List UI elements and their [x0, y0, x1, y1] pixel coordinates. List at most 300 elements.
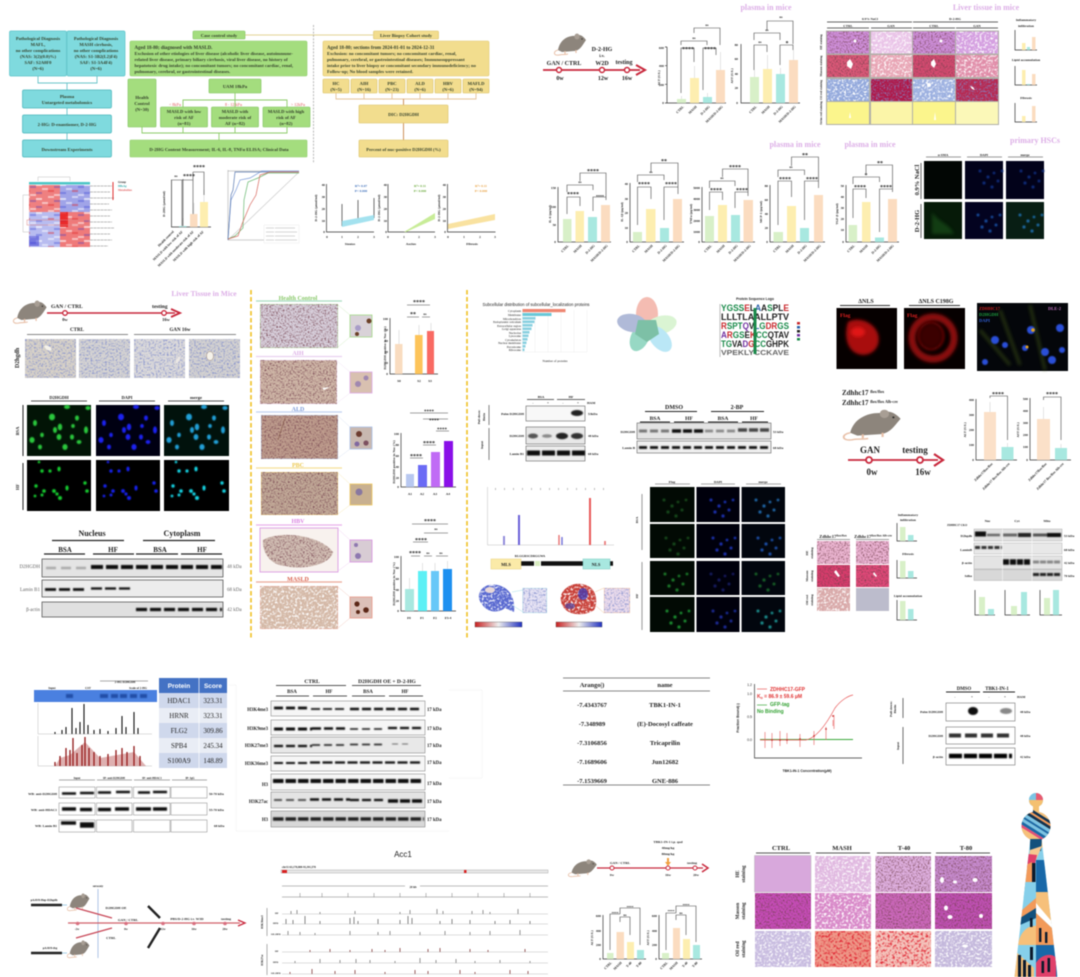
bar chart: IL-1β: 0 [626, 240, 628, 244]
bar chart: fibrosis grade: F1 [420, 616, 424, 620]
bar chart: subcellular distribution: Lysosome [509, 334, 522, 338]
bar chart: activity grade: 60 [396, 454, 399, 458]
bar chart: MCP-1: MASH/D-2-HG [803, 244, 822, 263]
box: percent positive [359, 140, 448, 157]
bar chart: Zdhhc17 AST: Zdhhc17flox/flox [1027, 462, 1048, 482]
western blot: histone modifications: H3K27me3 [245, 744, 269, 749]
scatter: fibrosis correlation 2: 10 [384, 219, 387, 223]
cohort groups: (N=94) [469, 87, 483, 92]
western blot: fractionation Zdhhc17: β-actin [962, 561, 972, 565]
scatter: fibrosis correlation 3: 20 [443, 207, 446, 211]
panel: D2HGDH immunofluorescence [15, 395, 229, 511]
scatter: fibrosis correlation 1: 20 [322, 207, 325, 211]
bar chart: TBK1 AST: MASH [669, 961, 679, 971]
panel: TBK1-IN-1 histology grid: Oil red [736, 941, 741, 957]
bar chart: ALT: ns [705, 23, 709, 27]
panel: Zdhhc17 liver histology: Zdhhc17 [854, 534, 871, 539]
panel: Zdhhc17 liver histology [805, 534, 893, 611]
bar chart: TBK1 AST: T-80 [691, 961, 699, 968]
panel: D2hgdh immunohistochemistry [15, 328, 240, 378]
bar chart: TNFα: MASH/D-2-HG [733, 244, 752, 263]
cohort groups: (N=6) [414, 87, 426, 92]
panel: TBK1-IN-1 histology grid: T-80 [960, 845, 972, 852]
sequence logo: YGSSELAASPLE [721, 303, 789, 313]
bar chart: AST: 0 [736, 101, 738, 105]
bar chart: IL-1β: 30 [625, 197, 628, 201]
bar chart: ALT: MASH/D-2-HG [705, 105, 724, 124]
bar chart: MCP-1: 20 [765, 226, 768, 230]
panel: histology grid D-2-HG: CTRL [843, 24, 853, 28]
timeline: GAN liver tissue: testing [152, 304, 168, 310]
bar chart: IL-1β: ns [649, 170, 653, 174]
bar chart: TGF-β: D-2-HG [871, 244, 882, 255]
panel: histology grid D-2-HG [819, 17, 999, 125]
timeline: D-2-HG mouse model: 12w [598, 76, 609, 82]
panel: Flag DAPI merge immunofluorescence grid: BSA [635, 516, 639, 523]
western blot: palmitoylation pull-down: 53kDa [588, 412, 598, 416]
cohort groups: (N=5) [330, 87, 342, 92]
box: health control: Health [135, 95, 149, 100]
mini bar charts: liver histology scores: Lipid accumulation [1012, 58, 1040, 62]
diagram: AAV injection timeline: 16w [191, 927, 197, 931]
bar chart: TGF-β: **** [880, 185, 892, 191]
bar chart: subcellular distribution: Endoplasmic reticulum [493, 320, 522, 324]
western blot: TBK1-IN-1 palmitoylation: β-actin [933, 755, 943, 759]
diagram: AAV injection timeline: 12w [160, 927, 166, 931]
box: high risk of AF: MASLD with high [268, 109, 305, 114]
IHC: HBV: HBV [291, 519, 305, 525]
bar chart: MCP-1: 0 [766, 240, 768, 244]
western blot: palmitoylation pull-down: 68 kDa [588, 452, 599, 456]
western blot: palmitoylation pull-down: Biotin [482, 413, 486, 421]
bar chart: Zdhhc17 ALT: Zdhhc17 flox/flox Alb-cre [982, 462, 1011, 491]
cohort groups: HC [333, 81, 339, 86]
table: interacting proteins: 148.89 [203, 757, 223, 765]
thresholds: kPa labels: < 8kPa [169, 102, 181, 107]
bar chart: TBK1 ALT: 400 [596, 929, 601, 933]
scatter: fibrosis correlation 1: D-2-HG (μmol/ml) [314, 195, 318, 221]
chart: ROC curves [228, 170, 299, 243]
bar chart: TNFα: TNFα (pg/ml) [689, 204, 693, 224]
bar chart: fibrosis grade: **** [415, 538, 427, 544]
panel: histology grid D-2-HG: HE staining [819, 34, 823, 50]
sequence logo: Protein Sequence Logo [736, 297, 774, 301]
bar chart: subcellular distribution: Subcellular distribution of subcellular_localization proteins [482, 302, 590, 307]
box: MASH cirrhosis diagnosis: MASH cirrhosis, [79, 42, 113, 47]
panel: patient liver IHC column [256, 296, 372, 629]
box: cohort title [374, 31, 438, 39]
bar chart: TBK1 ALT: 600 [596, 914, 601, 918]
bar chart: TGF-β: 20 [841, 217, 844, 221]
image: ZDHHC17 D2HGDH DAPI immunofluorescence: DLE-2 [1048, 306, 1062, 311]
bar chart: fibrosis grade: **** [424, 519, 436, 525]
western blot: histone modifications: D2HGDH OE + D-2-HG [358, 679, 417, 685]
diagram: AAV injection timeline: -2w [75, 927, 80, 931]
box: MAFL diagnosis: (N=6) [32, 66, 44, 71]
bar chart: Zdhhc17 AST: 100 [1023, 445, 1028, 449]
table: docking results: Tricaprilin [650, 740, 680, 747]
chart: MST binding curve: No Binding [757, 709, 784, 715]
bar chart: AST: AST (U/L) [730, 68, 734, 84]
western blot: co-IP validation: IP: anti-HDAC1 [142, 777, 162, 780]
scatter: fibrosis correlation 2: 30 [384, 195, 387, 199]
table: docking results: -7.1689606 [577, 759, 608, 766]
bar chart: ALT: MASH [688, 105, 698, 115]
western blot: TBK1-IN-1 palmitoylation: D2HGDH [928, 734, 943, 738]
thresholds: kPa labels: > 12kPa [291, 102, 305, 107]
bar chart: activity grade: A1 [408, 492, 412, 496]
box: inclusion and exclusion criteria: Aged 18-80; diagnosed with MASLD. [134, 46, 212, 51]
IHC: MASLD: MASLD [287, 577, 309, 583]
scatter: fibrosis correlation 2: Ascites [406, 242, 417, 246]
western blot: co-IP validation: 50-70 kDa [209, 792, 224, 796]
connector arrows: cohort flow [336, 93, 476, 99]
bar chart: TNFα: **** [736, 188, 748, 194]
box: MAFL diagnosis [10, 31, 66, 76]
bar chart: ALT: ns [692, 36, 696, 40]
scatter: fibrosis correlation 1: 40 [322, 183, 325, 187]
bar chart: fibrosis grade: ns [439, 551, 443, 555]
IHC: HBV [256, 519, 372, 572]
panel: Zdhhc17 liver histology: staining [810, 547, 814, 559]
timeline: D-2-HG mouse model: D-2-HG [592, 47, 613, 53]
box: 2-HG enantiomer: 2-HG: D-enantiomer, D-2-HG [38, 122, 97, 127]
bar chart: TGF-β [835, 161, 899, 263]
table: interacting proteins: SPB4 [171, 742, 187, 750]
bar chart: TBK1 AST: 400 [652, 929, 657, 933]
western blot: TBK1-IN-1 palmitoylation: Biotin [893, 704, 897, 713]
diagram: AAV injection timeline: 0w [124, 927, 129, 931]
table: docking results: -7.3106856 [577, 740, 608, 747]
scatter: fibrosis correlation 1: 0 [323, 230, 325, 234]
bar chart: AST: 60 [735, 57, 738, 61]
panel: Zdhhc17 liver histology: flox/flox Alb-cre [871, 534, 893, 538]
protein surface: wild type [475, 584, 547, 627]
bar chart: activity grade: A3 [433, 492, 437, 496]
bar chart: subcellular distribution: Number of proteins [543, 359, 568, 363]
table: interacting proteins: HRNR [169, 712, 189, 720]
box: MASH cirrhosis diagnosis: (N=6) [90, 66, 102, 71]
table: interacting proteins [159, 678, 227, 768]
bar chart: Zdhhc17 AST: 200 [1023, 433, 1028, 437]
IHC: MASLD [256, 577, 372, 629]
timeline: Zdhhc17 conditional mouse: 16w [915, 467, 931, 477]
scatter: fibrosis correlation 2: 2 [418, 235, 420, 239]
bar chart: steatosis grade: S0 [397, 379, 401, 383]
bar chart: Zdhhc17 AST: **** [1046, 392, 1058, 398]
table: interacting proteins: 245.34 [203, 742, 223, 750]
bar chart: TNFα: MASH [716, 244, 726, 254]
bar chart: MCP-1: 60 [765, 198, 768, 202]
bar chart: TBK1 ALT: **** [612, 911, 619, 915]
bar chart: fibrosis grade: F3-4 [445, 616, 452, 620]
bar chart: subcellular distribution: Nuclear membrane [498, 341, 522, 345]
scatter: fibrosis correlation 3: 0 [447, 235, 449, 239]
western blot: histone modifications: 17 kDa [427, 782, 442, 787]
box: inclusion and exclusion criteria: pulmonary, cerebral, or gastrointestinal diseases. [134, 69, 230, 74]
scatter: fibrosis correlation 1: R²= 0.07 [355, 184, 367, 188]
box: downstream experiments: Downstream Experiments [41, 147, 93, 152]
panel: D2hgdh immunohistochemistry: D2hgdh [15, 347, 21, 368]
western blot: TBK1-IN-1 palmitoylation: + [1004, 695, 1006, 699]
image: ZDHHC17 D2HGDH DAPI immunofluorescence: ZDHHC17 [979, 306, 1001, 311]
timeline: TBK1-IN-1 treatment: GAN / CTRL [610, 861, 631, 865]
panel: D2HGDH immunofluorescence: HF [15, 484, 20, 490]
timeline: TBK1-IN-1 treatment: 16w [665, 873, 671, 877]
box: MAFL diagnosis: (NAS: 3(2)(0.0)%) [20, 54, 56, 59]
heading: liver tissue in mice: Liver tissue in mice [953, 3, 1020, 12]
bar chart: IL-1β: ** [661, 159, 667, 165]
scatter: fibrosis correlation 1: 3 [373, 235, 375, 239]
bar chart: subcellular distribution: Peroxisome [507, 345, 522, 349]
timeline: Zdhhc17 conditional mouse: testing [902, 445, 928, 455]
bar chart: TNFα: 0 [698, 240, 700, 244]
bar chart: Zdhhc17 AST: AST (U/L) [1016, 422, 1020, 438]
bar chart: TBK1 ALT: ALT (U/L) [590, 930, 594, 946]
western blot: palmitoylation pull-down: BSA [538, 395, 545, 399]
panel: TBK1-IN-1 histology grid: Masson [736, 903, 741, 919]
panel: Zdhhc17 liver histology: HE [805, 550, 809, 555]
timeline: D-2-HG mouse model: W2D [595, 61, 609, 67]
heatmap: metabolites: Metabolites [118, 189, 133, 192]
box: health control [128, 79, 156, 127]
bar chart: steatosis grade: 60 [385, 339, 388, 343]
box: case control study title: Case control study [201, 33, 238, 38]
western blot: co-IP validation: Input [74, 777, 80, 780]
bar chart: activity grade: 20 [396, 476, 399, 480]
timeline: D-2-HG mouse model: testing [616, 60, 632, 66]
bar chart: ALT: D-2-HG [700, 105, 711, 116]
panel: nuclear cytoplasmic western blot: Lamin B1 [20, 588, 40, 593]
western blot: co-IP validation: WB: anti-HDAC1 [31, 808, 57, 812]
panel: nuclear cytoplasmic western blot: BSA [153, 546, 167, 554]
bar chart: plasma D-2-HG: **** [183, 174, 195, 180]
venn diagram: five sets [616, 297, 679, 356]
diagram: AAV injection timeline: PBS/D-2-HG i.v. W3D [170, 917, 204, 921]
bar chart: IL-6: D-2-HG [585, 244, 596, 255]
scatter: fibrosis correlation 1: 10 [322, 219, 325, 223]
table: interacting proteins: S100A9 [168, 757, 191, 765]
western blot: fractionation Zdhhc17: ZDHHC17 CKO [947, 524, 968, 527]
genome browser: Acc1 tracks: HF [275, 912, 279, 915]
bar chart: TBK1 ALT: MASH [613, 961, 623, 971]
bar chart: TGF-β: 50 [841, 184, 844, 188]
bar chart: activity grade: 100 [394, 432, 399, 436]
panel: D2HGDH immunofluorescence: merge [190, 395, 202, 400]
bar chart: Zdhhc17 AST [1016, 392, 1071, 491]
western blot: 2-BP treatment: BSA [718, 416, 728, 422]
IHC: PBC: PBC [292, 463, 304, 469]
box: percent positive: Percent of nuc-positive D2HGDH (%) [366, 147, 441, 152]
box: low risk of AF: MASLD with low [167, 109, 202, 114]
chart: MST binding curve: 1.0 [747, 692, 752, 696]
western blot: TBK1-IN-1 palmitoylation: DMSO [957, 687, 971, 692]
bar chart: fibrosis grade: F2 [433, 616, 437, 620]
panel: primary HSCs immunofluorescence: D-2-HG [914, 210, 921, 232]
bar chart: activity grade: 40 [396, 465, 399, 469]
scatter: fibrosis correlation 3: 1 [463, 235, 465, 239]
panel: IP-MS gel and spectra: Scale of 2-HG [129, 686, 148, 690]
western blot: co-IP validation: IP: anti-D2HGDH [103, 777, 126, 780]
bar chart: plasma D-2-HG: MASLD with low risk of AF [152, 230, 184, 262]
bar chart: AST: D-2-HG [773, 105, 784, 116]
timeline: D-2-HG mouse model: GAN / CTRL [547, 61, 581, 67]
bar chart: TNFα: 3000 [693, 208, 700, 212]
bar chart: activity grade: **** [423, 441, 435, 447]
scatter: fibrosis correlation 3: 3 [494, 235, 496, 239]
image: ZDHHC17 D2HGDH DAPI immunofluorescence [977, 303, 1068, 371]
western blot: 2-BP treatment: 68 kDa [773, 446, 784, 450]
scatter: fibrosis correlation 1: 0 [326, 235, 328, 239]
bar chart: activity grade: 0 [397, 485, 399, 489]
timeline: TBK1-IN-1 treatment: 20w [693, 873, 699, 877]
bar chart: AST: * [786, 41, 788, 47]
box: inclusion and exclusion criteria: related liver disease, primary biliary cirrhosis, viral liver disease, no history of [134, 57, 288, 62]
genome browser: Acc1 tracks: OE-HFD [271, 933, 281, 936]
bar chart: Zdhhc17 ALT [963, 392, 1017, 491]
bar chart: IL-6: 0 [554, 240, 556, 244]
bar chart: subcellular distribution: Mitochondrion [503, 317, 521, 321]
bar chart: MCP-1: **** [779, 177, 791, 183]
box: MAFL diagnosis: MAFL, [31, 42, 45, 47]
western blot: histone modifications: 17 kDa [427, 744, 442, 749]
bar chart: Zdhhc17 ALT: **** [992, 392, 1004, 398]
scatter: fibrosis correlation 3: Fibrosis [466, 242, 478, 246]
western blot: co-IP validation: 55-70 kDa [209, 808, 224, 812]
connector arrows: teal flow [38, 76, 97, 140]
bar chart: steatosis grade: 80 [385, 328, 388, 332]
diagram: AAV injection timeline: GAN / CTRL [118, 918, 139, 922]
bar chart: IL-1β: 10 [625, 226, 628, 230]
bar chart: TBK1 AST: 0 [655, 957, 657, 961]
table: docking results: Arango|) [580, 682, 604, 689]
western blot: histone modifications: H3 [262, 818, 269, 823]
sequence logo: TGVADGCCGHPK [721, 339, 789, 349]
box: MASH cirrhosis diagnosis: (NAS: S1-3B2(L2)F4) [75, 54, 118, 59]
scatter: fibrosis correlation 3: 0 [444, 230, 446, 234]
diagram: AAV injection timeline: CTRL [106, 936, 117, 940]
bar chart: subcellular distribution: Nucleolus [509, 331, 522, 335]
timeline: TBK1-IN-1 treatment: 0w [610, 873, 615, 877]
bar chart: IL-6: MASH/D-2-HG [590, 244, 609, 263]
bar chart: fibrosis grade: D2HGDH positive in Nuc (%) [392, 562, 396, 606]
chart: MST binding curve: 1.2 [747, 683, 752, 687]
diagram: protein domain map [491, 554, 613, 569]
cohort groups: MAFLD [468, 81, 485, 86]
box: cohort criteria: Exclusion: no concomitant tumors; no concomitant cardiac, renal, [327, 51, 456, 56]
bar chart: IL-6: IL-6 (pg/ml) [548, 205, 552, 223]
scatter: fibrosis correlation 3: 30 [443, 195, 446, 199]
chart: MST binding curve: 0.5 [747, 715, 752, 719]
bar chart: TBK1 ALT: CTRL [603, 960, 613, 970]
IHC: Health Control [256, 296, 372, 348]
timeline: Zdhhc17 conditional mouse: Zdhhc17 [842, 389, 868, 397]
bar chart: steatosis grade: S3 [428, 379, 432, 383]
heading: Acc1: Acc1 [394, 850, 412, 859]
box: case control study title [193, 31, 245, 39]
box: inclusion and exclusion criteria: Exclusion of other etiologies of liver disease (alcoholic liver disease, autoimmune- [134, 51, 293, 56]
bar chart: Zdhhc17 AST: 0 [1026, 458, 1028, 462]
bar chart: TGF-β: * [864, 173, 868, 179]
western blot: co-IP validation: WB: anti-D2HGDH [28, 792, 57, 796]
bar chart: IL-1β [620, 159, 684, 263]
bar chart: TBK1 AST: 200 [652, 943, 657, 947]
arrows: cohort to DIC [402, 99, 404, 140]
box: low risk of AF [160, 107, 208, 127]
chart: MST binding curve [736, 683, 862, 773]
bar chart: MCP-1: CTRL [772, 243, 782, 253]
panel: nuclear cytoplasmic western blot [19, 529, 242, 617]
bar chart: TGF-β: TGF-β (pg/ml) [835, 203, 839, 225]
scatter: fibrosis correlation 2: 3 [434, 235, 436, 239]
box: MASH cirrhosis diagnosis: Pathological Diagnosis [74, 36, 118, 41]
cohort groups: (N=6) [442, 87, 454, 92]
bar chart: MCP-1: ns [789, 165, 793, 169]
panel: nuclear cytoplasmic western blot: 68 kDa [227, 588, 242, 593]
panel: nuclear cytoplasmic western blot: HF [108, 546, 118, 554]
scatter: fibrosis correlation 1: 30 [322, 195, 325, 199]
bar chart: Zdhhc17 ALT: Zdhhc17flox/flox [973, 462, 994, 482]
table: docking results: name [657, 682, 673, 689]
bar chart: IL-1β: 20 [625, 211, 628, 215]
genome browser: Acc1 tracks: chr11:63,170,808-93,391,578 [282, 866, 316, 869]
bar chart: TBK1 AST [646, 903, 702, 971]
table: docking results: -7.1539669 [577, 778, 608, 785]
western blot: histone modifications: H3K9me3 [247, 727, 269, 732]
box: cohort title: Liver Biopsy Cohort study [380, 33, 433, 38]
table: docking results: Jun12682 [652, 759, 678, 766]
table: interacting proteins: FLG2 [171, 727, 188, 735]
timeline: TBK1-IN-1 treatment: 80mg/kg [662, 852, 675, 856]
western blot: co-IP validation: 68 kDa [214, 824, 225, 828]
panel: IP-MS gel and spectra: 2-HG D2HGDH [115, 680, 136, 684]
box: DIC [359, 105, 448, 123]
bar chart: TBK1 ALT: ns [623, 913, 627, 917]
chart: MST binding curve: TBK1-IN-1 Concentration(μM) [782, 769, 832, 773]
panel: nuclear cytoplasmic western blot: β-actin [26, 608, 40, 613]
box: inclusion and exclusion criteria [130, 41, 307, 76]
box: moderate risk of AF: moderate risk of [219, 115, 252, 120]
bar chart: activity grade: **** [424, 410, 434, 415]
box: moderate risk of AF: MASLD with [222, 109, 249, 114]
bar chart: IL-1β: MASH [644, 244, 654, 254]
western blot: TBK1-IN-1 palmitoylation: + [971, 695, 973, 699]
bar chart: activity grade: **** [410, 454, 422, 460]
sequence logo: LLLTLAALLPTV [721, 312, 789, 322]
timeline: GAN liver tissue: Liver Tissue in Mice [171, 289, 237, 298]
bar chart: AST: ns [758, 40, 762, 44]
bar chart: TGF-β: 40 [841, 195, 844, 199]
sequence logo [720, 297, 800, 357]
table: docking results [563, 678, 710, 785]
box: low risk of AF: risk of AF [174, 115, 194, 120]
western blot: palmitoylation pull-down: Input [480, 440, 484, 449]
bar chart: fibrosis grade: ns [426, 551, 430, 555]
panel: ΔNLS Flag images: Flag [907, 313, 918, 319]
panel: TBK1-IN-1 histology grid: T-40 [898, 845, 910, 852]
timeline: Zdhhc17 conditional mouse: flox/flox Alb-cre [870, 399, 898, 404]
bar chart: IL-6: **** [567, 192, 579, 198]
timeline: TBK1-IN-1 treatment [568, 840, 708, 877]
bar chart: TNFα: **** [729, 165, 741, 171]
bar chart: plasma D-2-HG: D-2HG (μmol/ml) [162, 191, 166, 217]
mini bar charts: Zdhhc17 histology scores: Lipid accumulation [894, 594, 922, 598]
bar chart: TGF-β: 30 [841, 206, 844, 210]
panel: histology grid D-2-HG: Oil red staining [819, 80, 823, 100]
scatter: fibrosis correlation 2: 40 [384, 183, 387, 187]
box: MAFL diagnosis: Pathological Diagnosis [16, 36, 60, 41]
western blot: fractionation Zdhhc17: LaminB [960, 548, 973, 552]
